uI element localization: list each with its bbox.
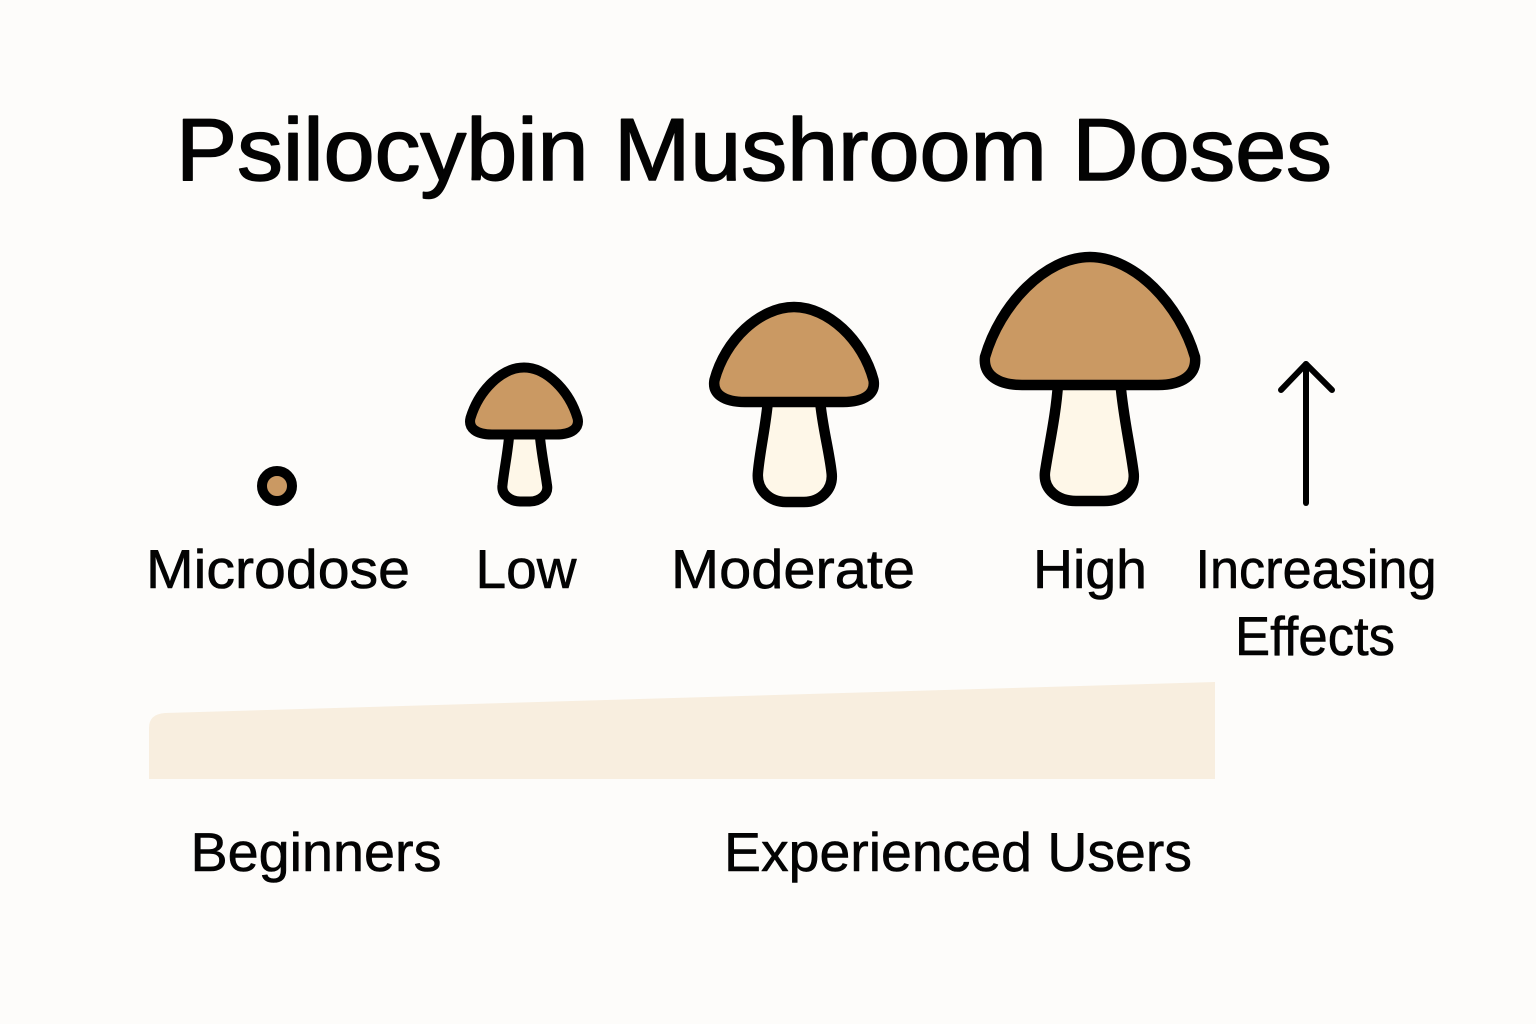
icon: low dose mushroom [470, 368, 578, 502]
label: High: High [1033, 538, 1147, 600]
icon: microdose dot [262, 471, 292, 501]
label: Moderate: Moderate [671, 538, 915, 600]
label: Beginners: Beginners [190, 821, 442, 883]
icon: moderate dose mushroom [714, 307, 874, 502]
label: Microdose: Microdose [146, 538, 410, 600]
label: Increasing Effects: Increasing [1196, 538, 1436, 600]
arrow: increasing effects [1281, 364, 1332, 503]
label: Increasing Effects [1196, 538, 1436, 667]
experience wedge bar [149, 682, 1215, 779]
label: Low: Low [476, 538, 577, 600]
label: Increasing Effects: Effects [1235, 605, 1395, 667]
icon: high dose mushroom [985, 257, 1195, 501]
label: Experienced Users: Experienced Users [724, 821, 1192, 883]
title: Psilocybin Mushroom Doses [176, 100, 1332, 199]
